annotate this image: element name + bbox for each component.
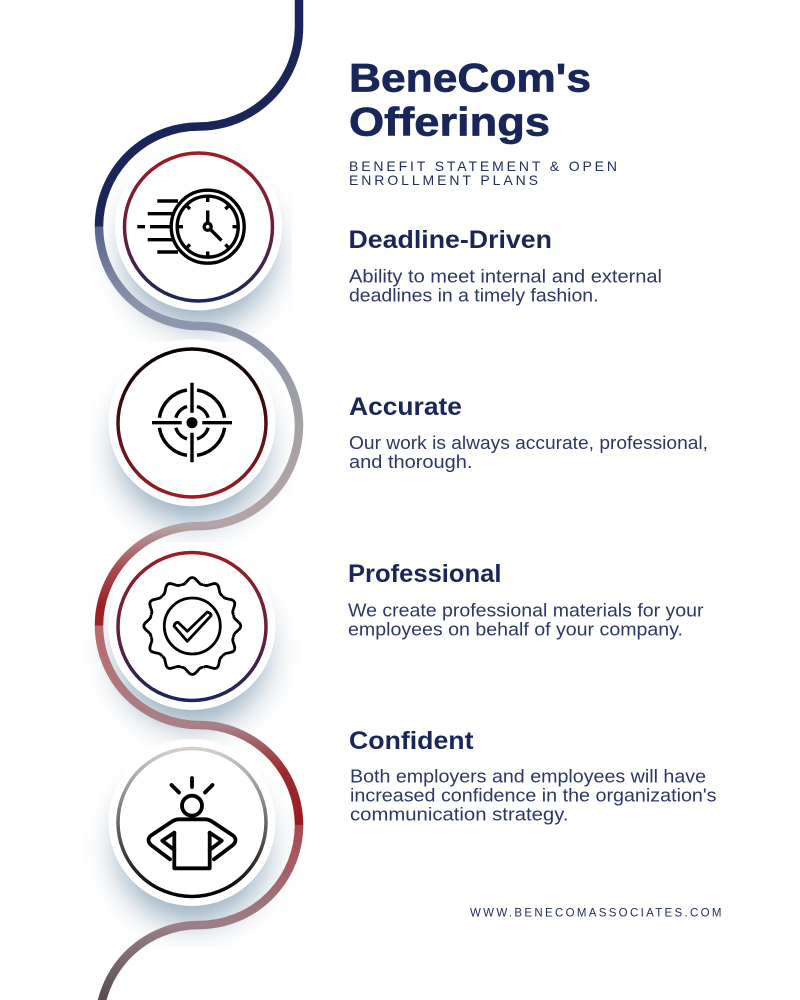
circle 1: deadline clock — [115, 144, 282, 310]
text block: Professional: employees on behalf of your company. — [348, 620, 683, 640]
text block: Confident: communication strategy. — [350, 804, 568, 824]
icon: speeding clock — [137, 190, 244, 263]
icon: person with hands on hips — [148, 778, 236, 868]
subtitle — [349, 158, 617, 188]
icon: scalloped badge with check — [144, 578, 241, 674]
text block: Deadline-Driven: deadlines in a timely fashion. — [349, 286, 598, 306]
website url: WWW.BENECOMASSOCIATES.COM — [470, 908, 722, 920]
text block: Professional — [348, 560, 704, 640]
drop shadows behind circles — [118, 178, 273, 922]
subtitle: BENEFIT STATEMENT & OPEN — [349, 158, 617, 174]
text block: Accurate: and thorough. — [349, 452, 472, 472]
text block: Accurate — [349, 393, 708, 472]
text block: Deadline-Driven: Deadline-Driven — [348, 226, 552, 254]
text block: Confident: Both employers and employees will have — [350, 766, 706, 786]
title — [349, 56, 591, 144]
title: BeneCom's — [349, 56, 591, 100]
text block: Professional: We create professional materials for your — [348, 600, 704, 620]
subtitle: ENROLLMENT PLANS — [349, 172, 538, 188]
text block: Professional: Professional — [348, 560, 502, 588]
title: Offerings — [349, 100, 550, 144]
circle 4: confident person — [108, 739, 276, 906]
text block: Confident: Confident — [349, 727, 474, 755]
winding gradient path — [99, 0, 299, 1000]
icon: crosshair target — [152, 383, 232, 462]
text block: Accurate: Our work is always accurate, professional, — [349, 433, 708, 453]
circle 2: accuracy target — [108, 339, 276, 506]
text block: Deadline-Driven: Ability to meet internal and external — [349, 266, 662, 286]
text block: Confident — [349, 727, 716, 824]
text block: Accurate: Accurate — [349, 393, 462, 421]
text block: Confident: increased confidence in the organization's — [350, 786, 716, 806]
text block: Deadline-Driven — [348, 226, 662, 306]
circle 3: professional badge — [108, 543, 276, 710]
